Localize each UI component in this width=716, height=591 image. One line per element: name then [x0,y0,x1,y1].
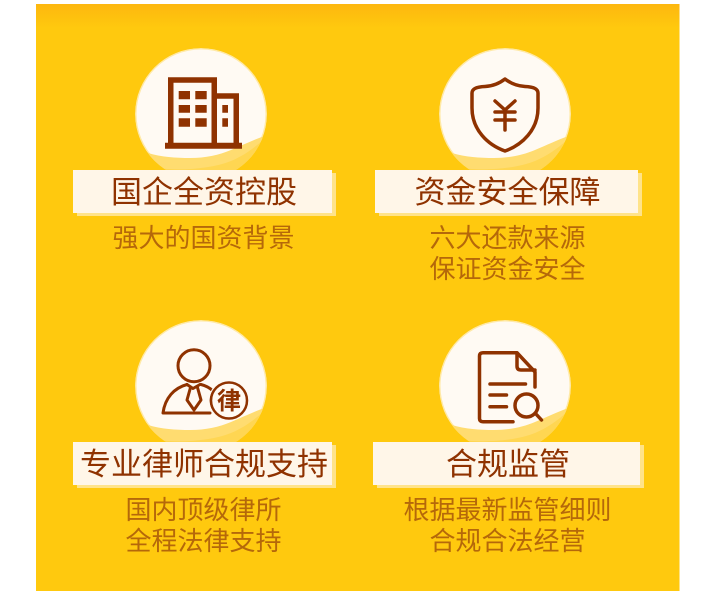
description: 全程法律支持 [125,526,282,556]
icon: shield with yen [472,79,538,151]
description [403,495,612,556]
description: 合规合法经营 [429,526,586,556]
panel: state-owned holding [73,48,336,253]
description: 强大的国资背景 [112,223,295,253]
icon disc: state-owned holding [135,48,267,170]
panel: legal support [73,320,336,556]
heading: 专业律师合规支持 [80,447,328,482]
description [125,495,282,556]
label shadow and box [373,442,644,488]
icon disc: legal support [135,320,267,442]
icon disc: compliance regulation [439,320,571,442]
description [429,223,586,284]
label shadow and box [73,170,336,216]
description: 保证资金安全 [429,254,586,284]
heading: 合规监管 [446,447,570,482]
description: 六大还款来源 [429,223,586,253]
heading: 国企全资控股 [111,175,297,210]
panel: compliance regulation [373,320,644,556]
description: 根据最新监管细则 [403,495,612,525]
icon: lawyer with badge: 律 [217,388,241,415]
icon: document with magnifier [480,353,542,422]
panel: fund safety [375,48,642,284]
icon disc: fund safety [439,48,571,170]
label shadow and box [375,170,642,216]
label shadow and box [73,442,336,488]
description: 国内顶级律所 [125,495,282,525]
icon: lawyer with badge [163,350,248,420]
heading: 资金安全保障 [414,175,600,210]
icon: office building [165,77,242,149]
